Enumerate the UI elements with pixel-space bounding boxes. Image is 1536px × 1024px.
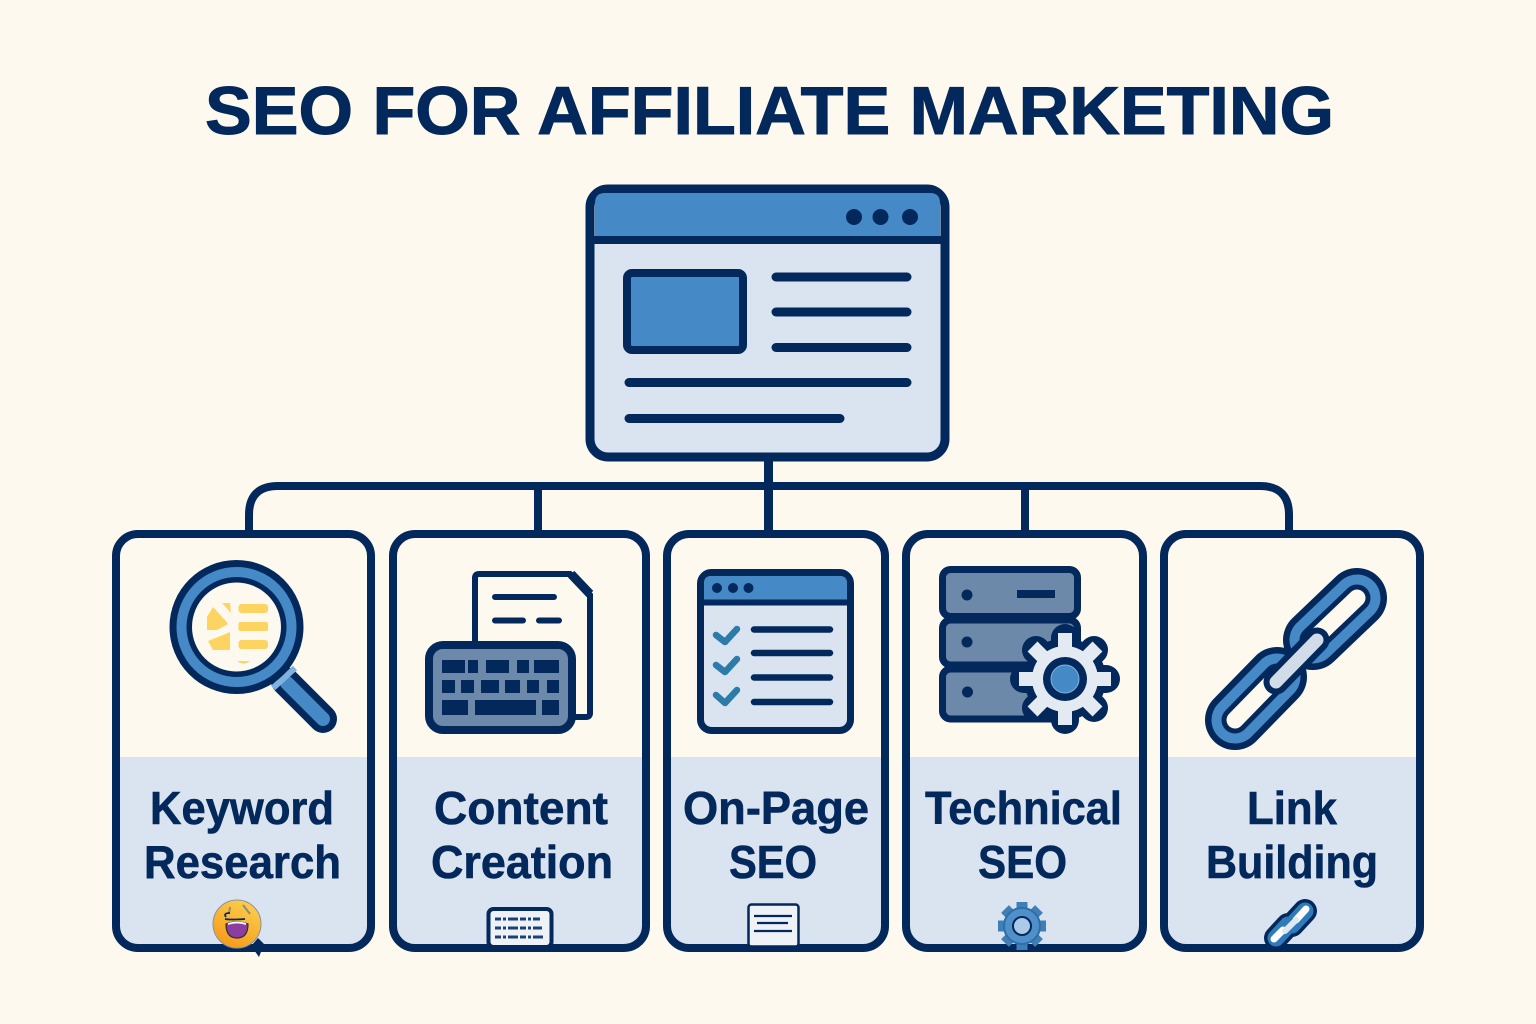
panel: on-page seo: [667, 534, 885, 948]
icon: checklist window: [700, 572, 851, 730]
panel: technical seo: [906, 534, 1143, 950]
label: seo: SEO: [729, 836, 817, 888]
label: keyword research: Keyword: [150, 782, 334, 834]
icon: mini chain: [1274, 909, 1306, 939]
label: on-page: On-Page: [683, 782, 869, 834]
panel: keyword research: [116, 534, 371, 957]
panel: link building: [1164, 534, 1420, 948]
panel: content creation: [393, 534, 646, 948]
title: SEO FOR AFFILIATE MARKETING: [205, 73, 1334, 149]
label: building: Building: [1206, 836, 1378, 888]
icon: main browser window: [590, 189, 945, 457]
icon: server and gear: [942, 570, 1111, 725]
label: technical: Technical: [925, 782, 1122, 834]
icon: gear: [1019, 633, 1111, 725]
label: creation: Creation: [431, 836, 613, 888]
icon: mini keyboard: [488, 909, 552, 947]
icon: chain links: [1235, 598, 1357, 720]
icon: mini gear: [998, 902, 1046, 950]
label: seo: SEO: [978, 836, 1067, 888]
label: content: Content: [434, 782, 608, 834]
icon: magnifying glass: [170, 560, 323, 719]
icon: document and keyboard: [429, 574, 590, 730]
label: link: Link: [1247, 782, 1337, 834]
icon: mini document: [748, 904, 798, 946]
label: research: Research: [144, 836, 341, 888]
connector tree: [249, 458, 1289, 534]
icon: laughing emoji: [213, 900, 264, 957]
